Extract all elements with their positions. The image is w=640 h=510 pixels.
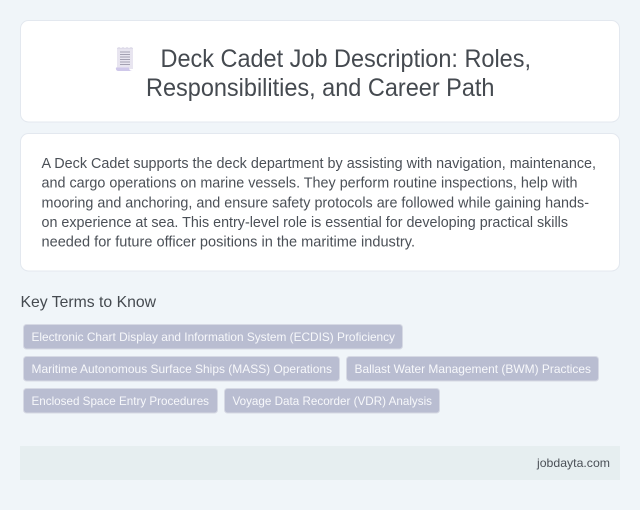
tag: BWM bbox=[346, 356, 598, 381]
text block: description paragraph: and cargo operations on marine vessels. They perform routine inspections, help with bbox=[42, 176, 578, 192]
tag: MASS: Maritime Autonomous Surface Ships (MASS) Operations bbox=[32, 362, 332, 376]
title: Deck Cadet Job Description: Roles, bbox=[160, 45, 531, 73]
tag: ECDIS bbox=[24, 324, 402, 349]
panel: description bbox=[20, 134, 620, 271]
tag: VDR bbox=[224, 388, 440, 413]
footer bbox=[20, 446, 620, 480]
tag: enclosed space: Enclosed Space Entry Procedures bbox=[32, 394, 209, 408]
footer: jobdayta.com bbox=[536, 456, 610, 470]
title: Responsibilities, and Career Path bbox=[146, 74, 494, 102]
text block: description paragraph bbox=[42, 156, 596, 250]
title bbox=[146, 45, 531, 102]
tag: BWM: Ballast Water Management (BWM) Practices bbox=[354, 362, 591, 376]
icon: document scroll bbox=[116, 47, 133, 71]
tag: ECDIS: Electronic Chart Display and Information System (ECDIS) Proficiency bbox=[32, 330, 395, 344]
heading: key terms: Key Terms to Know bbox=[20, 294, 156, 311]
text block: description paragraph: mooring and anchoring, and ensure safety protocols are followed while gaining hands- bbox=[42, 195, 589, 211]
text block: description paragraph: needed for future officer positions in the maritime industry. bbox=[42, 234, 415, 250]
tag: enclosed space bbox=[24, 388, 218, 413]
panel: title card bbox=[20, 20, 620, 122]
text block: description paragraph: on experience at sea. This entry-level role is essential for developing practical skills bbox=[42, 215, 568, 231]
tag: VDR: Voyage Data Recorder (VDR) Analysis bbox=[232, 394, 432, 408]
text block: description paragraph: A Deck Cadet supports the deck department by assisting with navigation, maintenance, bbox=[42, 156, 596, 172]
tag: MASS bbox=[24, 356, 340, 381]
